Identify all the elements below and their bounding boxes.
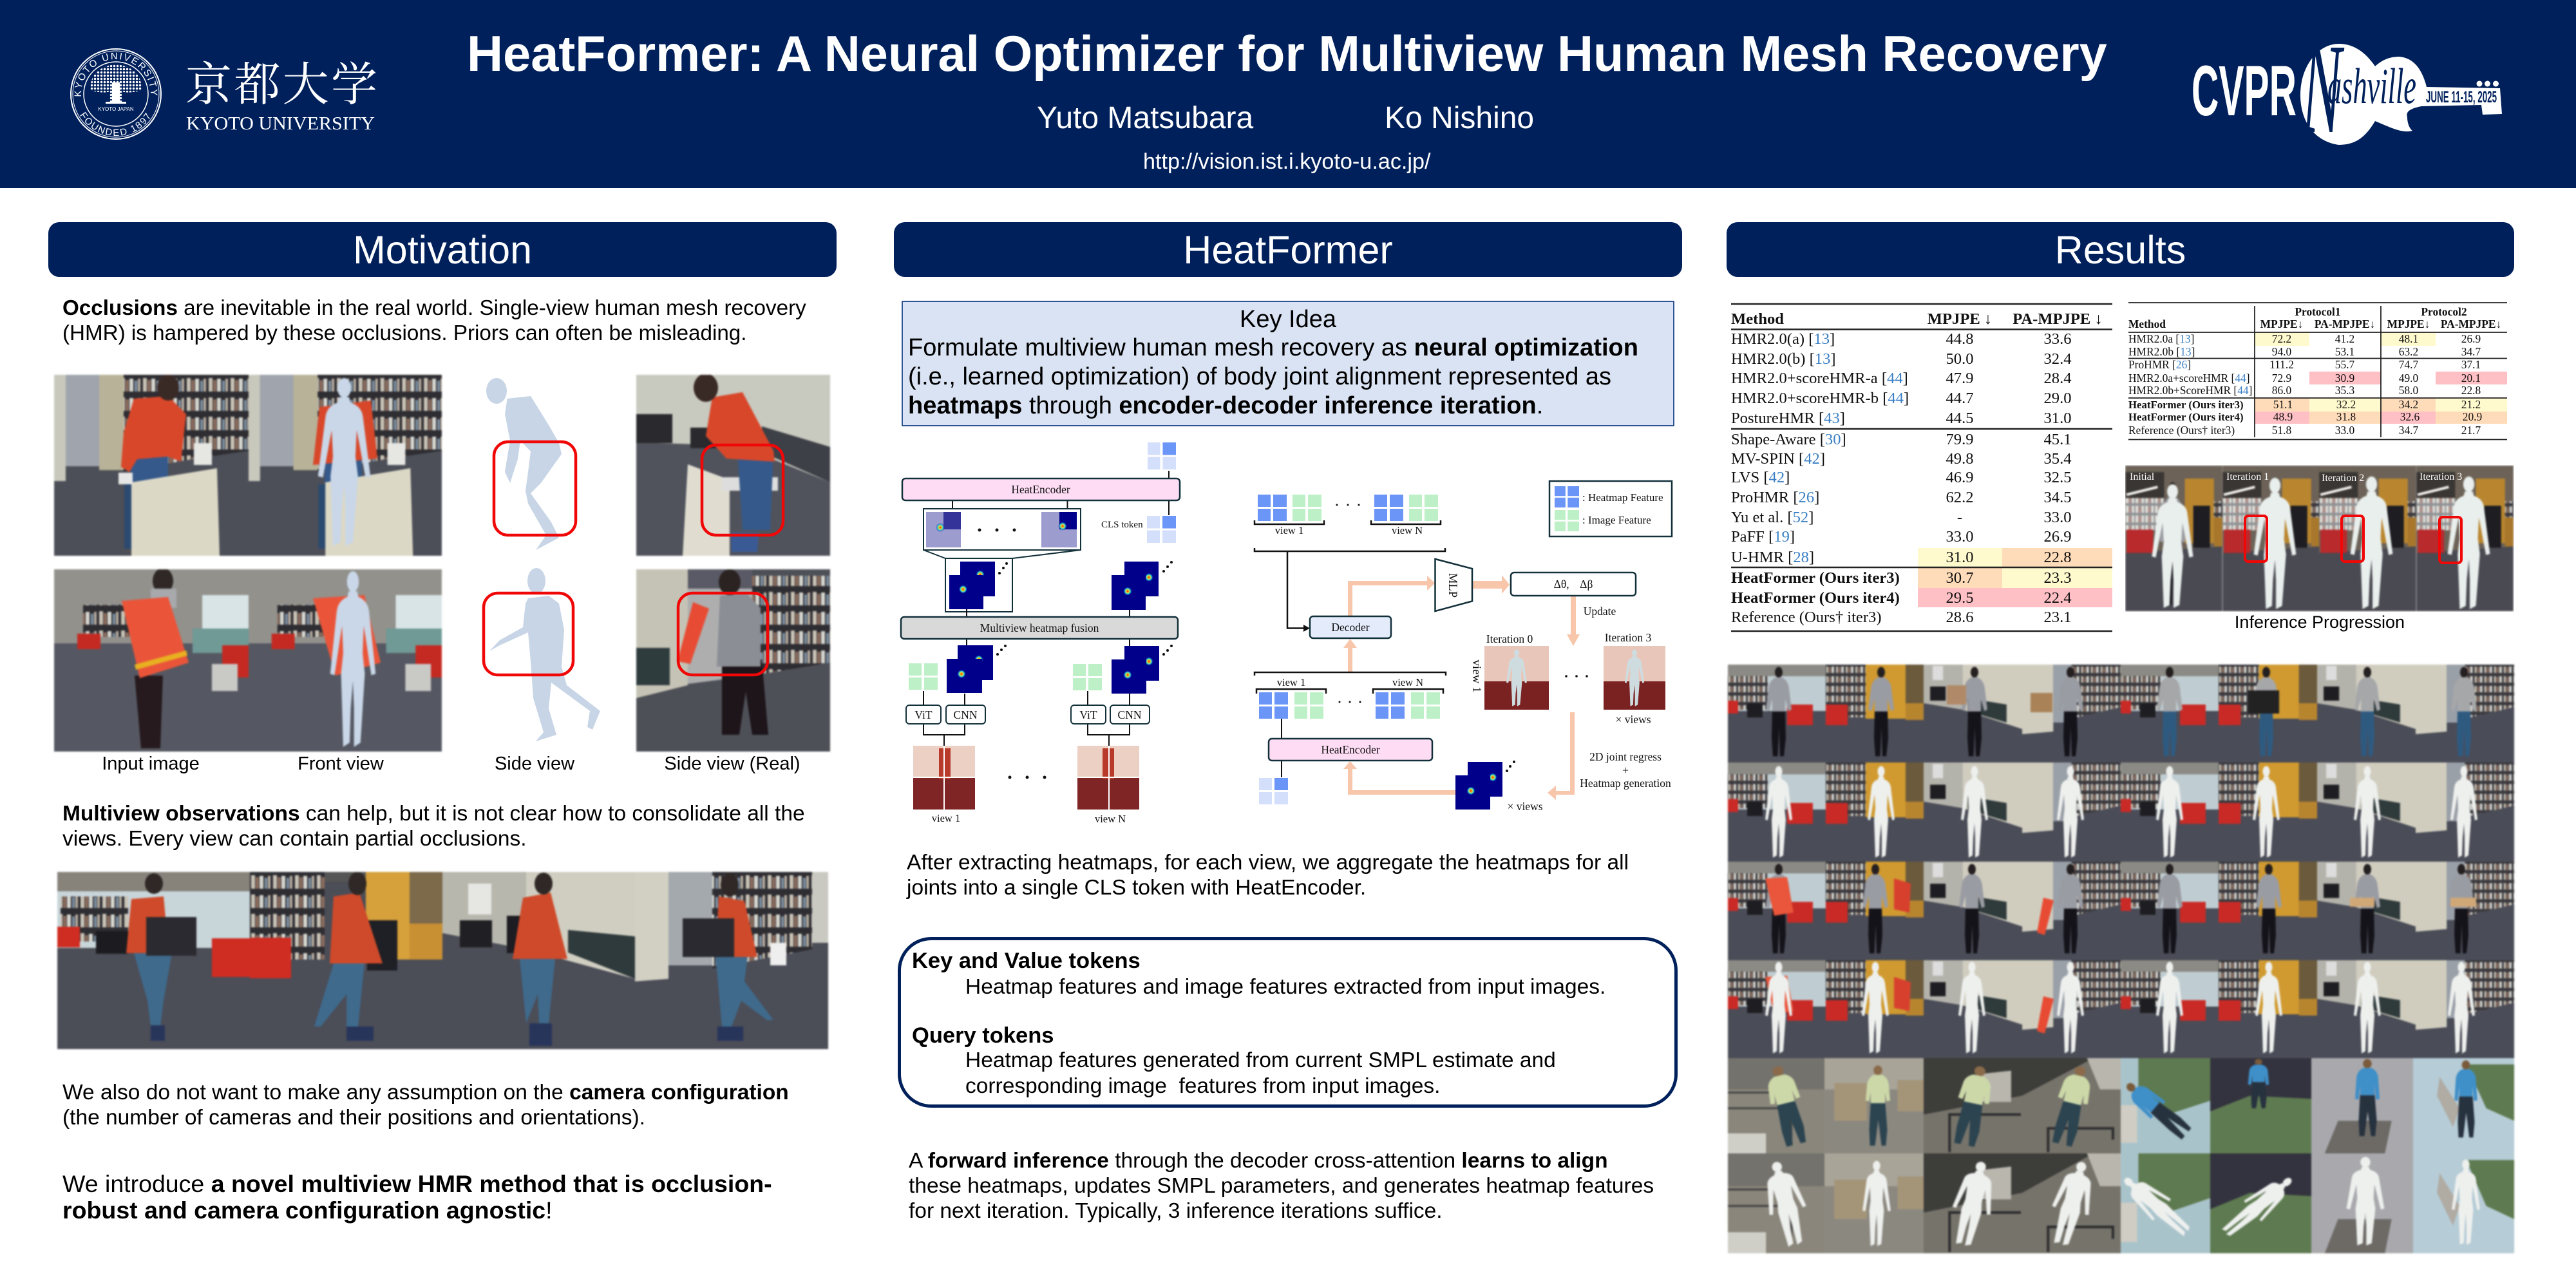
2D joint regress note: 2D joint regress xyxy=(1589,750,1662,763)
decoder input tokens: view N xyxy=(1392,524,1423,536)
PA-MPJPE values: 22.8 xyxy=(2043,549,2072,566)
header: Method xyxy=(2128,317,2166,330)
parameter update box: Update xyxy=(1584,605,1616,618)
logo: Kyoto University: KYOTO JAPAN xyxy=(98,106,134,112)
protocol 1 values: 41.2 xyxy=(2335,332,2354,345)
view 1 xyxy=(57,872,250,1049)
decoder xyxy=(1310,616,1391,638)
salmon flow arrows xyxy=(1343,575,1580,800)
heading: Results: Results xyxy=(2055,228,2186,272)
MPJPE values: 46.9 xyxy=(1946,469,1974,486)
protocol 2 values: 58.0 xyxy=(2399,384,2419,397)
frame labels: Iteration 3 xyxy=(2420,471,2462,482)
header: Protocol1 xyxy=(2295,305,2341,318)
protocol 1 values: 48.9 xyxy=(2273,410,2293,423)
backbone stage: ViT and CNN xyxy=(906,663,1150,746)
logo: CVPR Nashville guitar: ashville xyxy=(2327,58,2416,114)
row 2 input image xyxy=(53,568,250,753)
logo: Kyoto University: 京都大学 xyxy=(185,59,377,111)
row 2 front view xyxy=(247,568,443,753)
decoder input tokens: view 1 xyxy=(1275,524,1303,536)
panel: HeatFormer xyxy=(894,222,1682,1223)
protocol 1 values: 86.0 xyxy=(2272,384,2292,397)
row 1: input images xyxy=(1728,665,2514,762)
method names: ProHMR [26] xyxy=(1731,489,1819,506)
protocol 1 values: 72.9 xyxy=(2272,372,2291,384)
PA-MPJPE values: 23.1 xyxy=(2043,609,2072,626)
header: PA-MPJPE↓ xyxy=(2315,317,2375,330)
fusion stage xyxy=(901,609,1178,646)
iteration 2 frame xyxy=(2319,466,2416,611)
frame labels xyxy=(2130,471,2462,484)
protocol 1 values: 32.2 xyxy=(2336,398,2356,411)
figure: occlusion examples xyxy=(53,374,831,753)
decoder input tokens xyxy=(1255,495,1445,632)
protocol 1 values: 111.2 xyxy=(2269,358,2294,371)
row 1 input and front view xyxy=(54,375,442,556)
iteration 3 frame xyxy=(2416,466,2514,611)
text: occlusions: Occlusions are inevitable in the real world. Single-view human mesh recovery (HMR) is hampered by these occlusions. Priors can often be misleading. xyxy=(62,296,806,345)
row 2: mesh overlays xyxy=(1728,762,2514,862)
protocol 2 values: 49.0 xyxy=(2399,372,2419,384)
row 2 input and front view xyxy=(54,568,442,752)
fusion stage: Multiview heatmap fusion xyxy=(980,621,1099,634)
panel: Motivation xyxy=(48,222,837,1224)
MPJPE values: 49.8 xyxy=(1946,450,1974,468)
header banner xyxy=(0,0,2576,188)
method names: Shape-Aware [30] xyxy=(1731,431,1846,448)
MPJPE values: 33.0 xyxy=(1946,528,1974,545)
iteration images: Iteration 0 xyxy=(1486,632,1533,645)
method names: HeatFormer (Ours iter3) xyxy=(1731,569,1900,587)
method names: HeatFormer (Ours iter3) xyxy=(2128,399,2244,411)
logo: Kyoto University: KYOTO UNIVERSITY xyxy=(75,53,157,97)
PA-MPJPE values: 45.1 xyxy=(2043,431,2072,448)
logo: Kyoto University: KYOTO UNIVERSITY xyxy=(186,113,375,134)
figure: qualitative results grid xyxy=(1728,665,2514,1253)
backbone stage: ViT and CNN: CNN xyxy=(954,708,978,721)
key and value description: Heatmap features and image features extracted from input images. xyxy=(965,975,1605,999)
text: forward inference: A forward inference through the decoder cross-attention learns to align these heatmaps, updates SMPL parameters, and generates heatmap features for next iteration. Typically, 3 inference iterations suffice. xyxy=(909,1149,1654,1223)
diagram: HeatFormer architecture xyxy=(900,442,1673,825)
frame labels: Initial xyxy=(2130,471,2155,482)
method names xyxy=(2128,332,2252,437)
PA-MPJPE values: 22.4 xyxy=(2043,589,2072,607)
protocol 1 values: 51.1 xyxy=(2273,398,2293,411)
frame labels: Iteration 1 xyxy=(2226,471,2269,482)
logo: Kyoto University xyxy=(70,48,377,140)
protocol 2 values: 21.7 xyxy=(2461,424,2481,437)
MLP xyxy=(1435,559,1472,611)
MPJPE values: 44.8 xyxy=(1946,330,1974,348)
protocol 1 values: 53.1 xyxy=(2335,345,2354,358)
text: multiview observations: Multiview observations can help, but it is not clear how to consolidate all the views. Every view can contain partial occlusions. xyxy=(62,802,805,851)
method names: ProHMR [26] xyxy=(2128,358,2191,371)
PA-MPJPE values: 32.5 xyxy=(2043,469,2072,486)
method names: PostureHMR [43] xyxy=(1731,410,1845,427)
row 5: outdoor input images xyxy=(1728,1058,2514,1153)
MPJPE values: 29.5 xyxy=(1946,589,1974,607)
row 6: outdoor mesh overlays xyxy=(1728,1153,2514,1253)
panel: tokens callout xyxy=(898,937,1678,1108)
protocol 2 values: 22.8 xyxy=(2461,384,2481,397)
generated heatmaps: × views xyxy=(1507,800,1543,813)
key idea heading: Key Idea xyxy=(1240,306,1336,333)
heading: HeatFormer xyxy=(894,222,1682,277)
PA-MPJPE values: 35.4 xyxy=(2043,450,2072,468)
text: extracting heatmaps: After extracting heatmaps, for each view, we aggregate the heatmaps for all joints into a single CLS token with HeatEncoder. xyxy=(907,851,1629,900)
table: method comparison xyxy=(1731,303,2112,632)
PA-MPJPE values: 31.0 xyxy=(2043,410,2072,427)
protocol 1 values: 30.9 xyxy=(2335,372,2354,384)
input images xyxy=(913,746,1139,825)
protocol 2 values xyxy=(2399,332,2482,437)
header: MPJPE↓ xyxy=(2387,317,2430,330)
PA-MPJPE values: 29.0 xyxy=(2043,390,2072,407)
method names: Yu et al. [52] xyxy=(1731,509,1814,526)
2D joint regress note xyxy=(1580,750,1671,790)
iteration images xyxy=(1470,631,1665,726)
input images: view N xyxy=(1095,813,1126,825)
encoder stage: CLS token: HeatEncoder xyxy=(1011,483,1070,496)
generated heatmaps xyxy=(1455,761,1543,813)
header: PA-MPJPE↓ xyxy=(2441,317,2501,330)
iteration images: Iteration 3 xyxy=(1605,631,1651,644)
protocol 2 values: 20.9 xyxy=(2463,410,2482,423)
decoder: Decoder xyxy=(1331,621,1370,634)
MPJPE values: 44.7 xyxy=(1946,390,1974,407)
row 1 input image xyxy=(53,374,250,557)
author: Yuto Matsubara: Yuto Matsubara xyxy=(1037,101,1253,135)
method names xyxy=(1731,330,1909,626)
figure: inference progression xyxy=(2125,465,2514,612)
method names: U-HMR [28] xyxy=(1731,549,1814,566)
protocol 2 values: 21.2 xyxy=(2461,398,2481,411)
protocol 2 values: 48.1 xyxy=(2399,332,2418,345)
logo: CVPR Nashville guitar: CVPR xyxy=(2192,52,2297,131)
protocol 2 values: 34.7 xyxy=(2461,345,2481,358)
caption: side view: Side view xyxy=(495,753,574,774)
protocol 1 values: 94.0 xyxy=(2272,345,2292,358)
query tokens and HeatEncoder: view N xyxy=(1392,676,1423,688)
PA-MPJPE values: 28.4 xyxy=(2043,370,2072,387)
MPJPE values: 47.9 xyxy=(1946,370,1974,387)
legend: : Heatmap Feature xyxy=(1582,491,1663,504)
header: Protocol2 xyxy=(2421,305,2467,318)
MPJPE values: 79.9 xyxy=(1946,431,1974,448)
caption: input image: Input image xyxy=(102,753,200,774)
protocol 2 values: 74.7 xyxy=(2399,358,2419,371)
iteration images: × views xyxy=(1615,713,1651,726)
heatmaps: joint stacks xyxy=(947,561,1173,694)
encoder stage: CLS token: CLS token xyxy=(1101,520,1143,530)
backbone stage: ViT and CNN: ViT xyxy=(914,708,933,721)
protocol 1 values: 33.0 xyxy=(2335,424,2355,437)
row 2 side view mesh xyxy=(489,568,600,741)
input images: view 1 xyxy=(932,812,960,824)
logo: CVPR Nashville guitar xyxy=(2192,39,2502,151)
row 2 side view real xyxy=(636,569,830,752)
method names: HMR2.0a+scoreHMR [44] xyxy=(2128,372,2250,384)
backbone stage: ViT and CNN: ViT xyxy=(1079,708,1097,721)
MLP: MLP xyxy=(1446,573,1459,598)
PA-MPJPE values xyxy=(2043,330,2072,626)
parameter update box xyxy=(1511,573,1636,618)
protocol 2 values: 34.7 xyxy=(2399,424,2419,437)
MPJPE values: 62.2 xyxy=(1946,489,1974,506)
heading: HeatFormer: HeatFormer xyxy=(1183,228,1393,272)
red highlight boxes xyxy=(2245,516,2461,563)
caption: side view real: Side view (Real) xyxy=(664,753,800,774)
header row: MPJPE ↓ xyxy=(1927,310,1992,328)
PA-MPJPE values: 23.3 xyxy=(2043,569,2072,587)
MPJPE values: 31.0 xyxy=(1946,549,1974,566)
header row: PA-MPJPE ↓ xyxy=(2012,310,2103,328)
protocol 2 values: 32.6 xyxy=(2400,410,2420,423)
text: camera configuration: We also do not want to make any assumption on the camera configuration (the number of cameras and their positions and orientations). xyxy=(62,1081,789,1130)
query description: Heatmap features generated from current SMPL estimate and corresponding image features from input images. xyxy=(965,1048,1556,1097)
protocol 1 values: 31.8 xyxy=(2336,410,2356,423)
table: protocol comparison xyxy=(2128,302,2507,440)
heading: Results xyxy=(1727,222,2514,277)
PA-MPJPE values: 26.9 xyxy=(2043,528,2072,545)
header row: Method xyxy=(1731,310,1784,328)
protocol 2 values: 20.1 xyxy=(2461,372,2481,384)
title: HeatFormer: A Neural Optimizer for Multiview Human Mesh Recovery xyxy=(467,26,2107,82)
view 2 xyxy=(250,872,442,1049)
method names: HMR2.0+scoreHMR-a [44] xyxy=(1731,370,1908,387)
row 1 side view real xyxy=(636,374,830,556)
method names: PaFF [19] xyxy=(1731,528,1795,545)
lab URL: http://vision.ist.i.kyoto-u.ac.jp/ xyxy=(1143,149,1431,174)
method names: HMR2.0(b) [13] xyxy=(1731,350,1836,368)
view 3 xyxy=(442,872,635,1049)
query tokens and HeatEncoder: view 1 xyxy=(1277,676,1305,688)
header row xyxy=(1731,310,2103,328)
2D joint regress note: + xyxy=(1622,764,1629,777)
initial frame xyxy=(2125,466,2222,611)
row 4: mesh overlays xyxy=(1728,960,2514,1058)
row 1 side view mesh xyxy=(486,378,562,550)
encoder stage: CLS token xyxy=(902,442,1180,612)
caption: front view: Front view xyxy=(298,753,384,774)
red highlight boxes xyxy=(484,442,783,675)
MPJPE values: 28.6 xyxy=(1946,609,1974,626)
method names: HMR2.0a [13] xyxy=(2128,332,2194,345)
query tokens and HeatEncoder xyxy=(1255,672,1446,804)
method names: HMR2.0b [13] xyxy=(2128,345,2195,358)
method names: MV-SPIN [42] xyxy=(1731,450,1825,468)
protocol 2 values: 37.1 xyxy=(2461,358,2481,371)
author: Ko Nishino: Ko Nishino xyxy=(1385,101,1534,135)
method names: Reference (Ours† iter3) xyxy=(1731,609,1882,626)
PA-MPJPE values: 33.0 xyxy=(2043,509,2072,526)
highlight cells xyxy=(1918,548,2112,607)
MPJPE values: 30.7 xyxy=(1946,569,1974,587)
frame labels: Iteration 2 xyxy=(2322,473,2364,484)
method names: Reference (Ours† iter3) xyxy=(2128,424,2235,437)
protocol 2 values: 34.2 xyxy=(2399,398,2418,411)
method names: HMR2.0b+ScoreHMR [44] xyxy=(2128,384,2252,397)
legend xyxy=(1549,481,1672,536)
iteration images: view 1 xyxy=(1470,659,1483,693)
query tokens and HeatEncoder: HeatEncoder xyxy=(1321,743,1380,756)
method names: HMR2.0(a) [13] xyxy=(1731,330,1835,348)
callout: key idea xyxy=(902,301,1674,426)
highlight cells xyxy=(2255,332,2507,424)
figure: multiview image strip xyxy=(56,871,829,1050)
MPJPE values: 50.0 xyxy=(1946,350,1974,368)
iteration 1 frame xyxy=(2222,466,2320,611)
text: conclusion: We introduce a novel multiview HMR method that is occlusion- robust and camera configuration agnostic! xyxy=(62,1170,772,1224)
protocol 2 values: 26.9 xyxy=(2461,332,2481,345)
method names: HeatFormer (Ours iter4) xyxy=(1731,589,1900,607)
PA-MPJPE values: 34.5 xyxy=(2043,489,2072,506)
backbone stage: ViT and CNN: CNN xyxy=(1118,708,1142,721)
protocol 2 values: 63.2 xyxy=(2399,345,2418,358)
method names: HeatFormer (Ours iter4) xyxy=(2128,411,2244,423)
method names: LVS [42] xyxy=(1731,469,1790,486)
PA-MPJPE values: 32.4 xyxy=(2043,350,2072,368)
row 3: input images xyxy=(1728,862,2514,960)
protocol 1 values: 51.8 xyxy=(2272,424,2292,437)
legend: : Image Feature xyxy=(1582,514,1651,526)
2D joint regress note: Heatmap generation xyxy=(1580,777,1671,790)
progression frames xyxy=(2125,466,2514,611)
MPJPE values: - xyxy=(1957,509,1962,526)
parameter update box: Δθ, Δβ xyxy=(1554,578,1593,591)
row 1 front view xyxy=(247,374,443,557)
MPJPE values xyxy=(1946,330,1974,626)
protocol 1 values: 35.3 xyxy=(2335,384,2355,397)
header xyxy=(2128,305,2501,330)
heading: Motivation: Motivation xyxy=(353,228,532,272)
method names: HMR2.0+scoreHMR-b [44] xyxy=(1731,390,1909,407)
MPJPE values: 44.5 xyxy=(1946,410,1974,427)
heading: Motivation xyxy=(48,222,837,277)
key idea body: Formulate multiview human mesh recovery as neural optimization (i.e., learned optimization) of body joint alignment represented as heatmaps through encoder-decoder inference iteration. xyxy=(908,334,1638,419)
protocol 1 values: 55.7 xyxy=(2335,358,2355,371)
view 4 xyxy=(635,872,828,1049)
PA-MPJPE values: 33.6 xyxy=(2043,330,2072,348)
panel: Results xyxy=(1727,222,2515,1255)
protocol 1 values xyxy=(2269,332,2356,437)
query tokens: Query tokens xyxy=(912,1023,1054,1048)
caption: inference progression: Inference Progression xyxy=(2235,612,2405,632)
key and value tokens: Key and Value tokens xyxy=(912,949,1141,973)
header: MPJPE↓ xyxy=(2260,317,2303,330)
protocol 1 values: 72.2 xyxy=(2272,332,2291,345)
logo: Kyoto University: FOUNDED 1897 xyxy=(80,112,150,137)
